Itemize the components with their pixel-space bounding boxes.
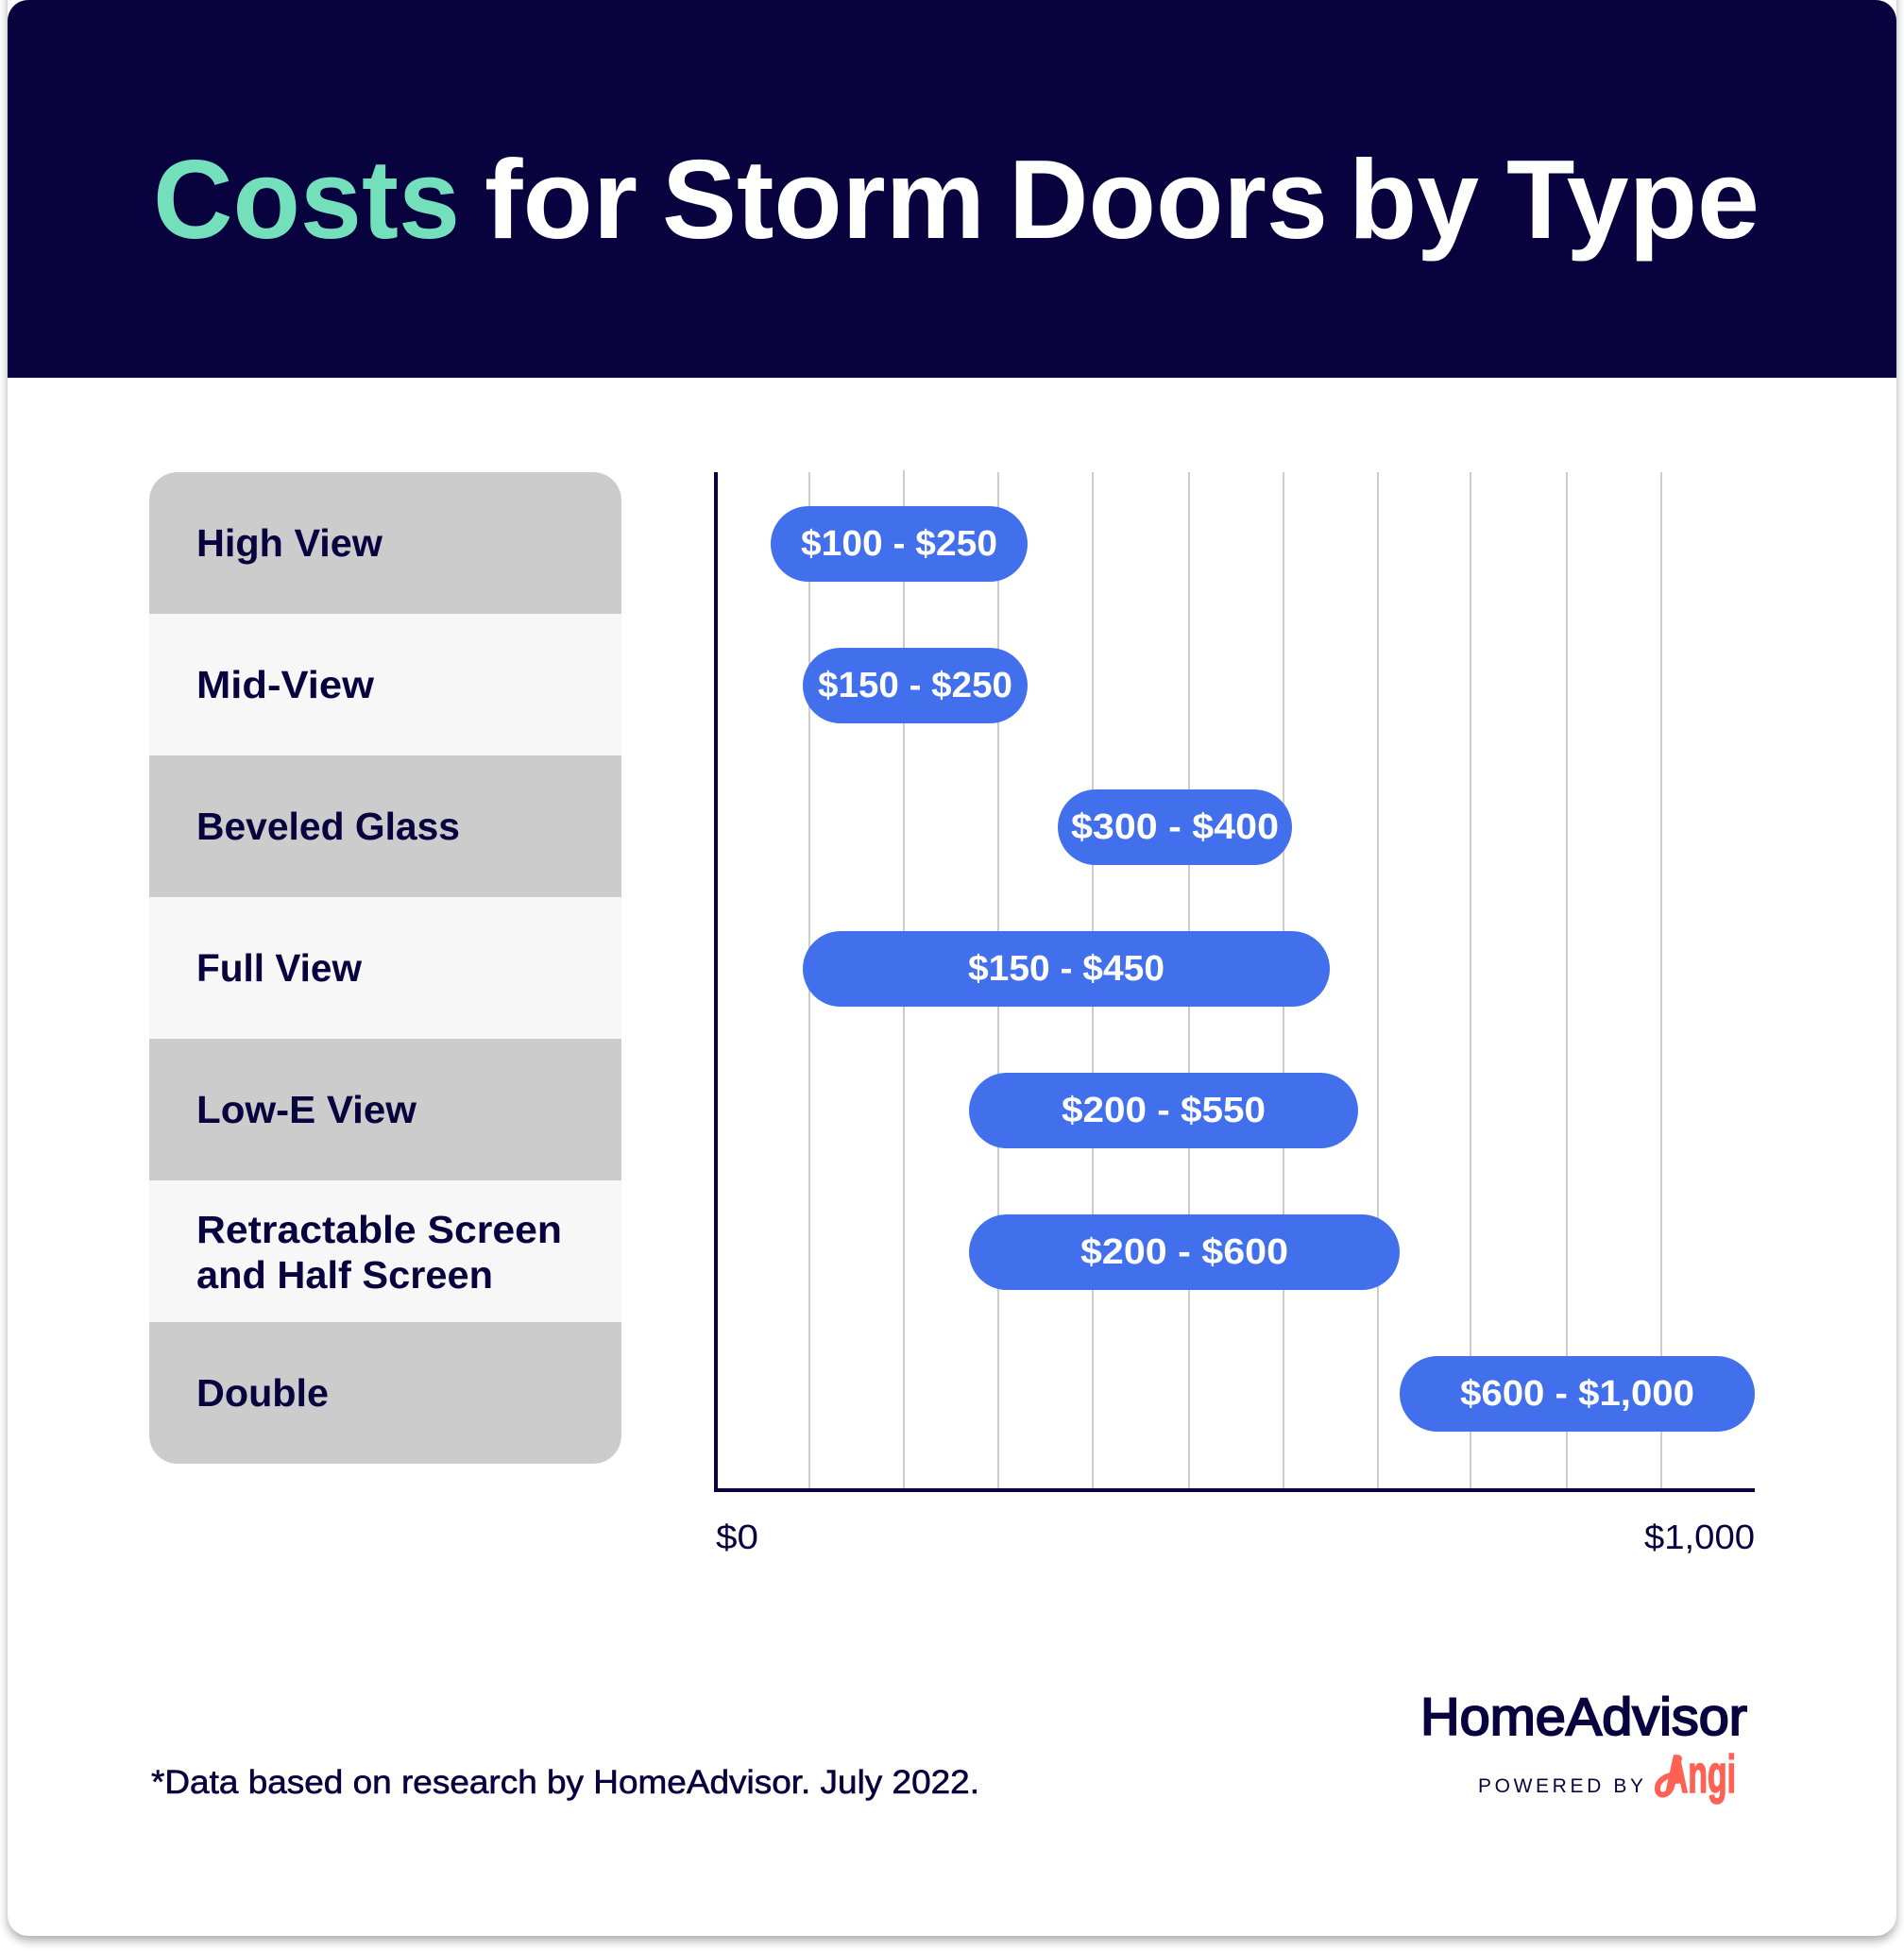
title: Doors (1009, 137, 1328, 263)
bar: Low-E View (969, 1073, 1358, 1148)
axis label: maximum: $1,000 (1644, 1518, 1755, 1556)
bar: Mid-View (803, 648, 1028, 723)
bar: Beveled Glass (1058, 789, 1292, 865)
wordmark: Angi (1658, 1744, 1736, 1805)
title: Storm (662, 137, 985, 263)
title: Type (1506, 137, 1760, 263)
title: by (1349, 137, 1479, 263)
panel: title header (8, 0, 1896, 378)
label: Retractable Screen and Half Screen: Retractable Screen (196, 1208, 562, 1251)
bar: Retractable Screen and Half Screen: $200 - $600 (1080, 1232, 1288, 1272)
label: Beveled Glass: Beveled Glass (196, 805, 460, 848)
label: Double: Double (196, 1371, 329, 1415)
bar: Retractable Screen and Half Screen (969, 1214, 1400, 1290)
tagline: powered by: POWERED BY (1478, 1775, 1643, 1797)
label: High View: High View (196, 521, 382, 565)
bar: Full View: $150 - $450 (968, 949, 1164, 989)
footnote: *Data based on research by HomeAdvisor. July 2022. (151, 1764, 979, 1801)
title: Costs (153, 137, 460, 263)
label: Retractable Screen and Half Screen: and Half Screen (196, 1253, 493, 1297)
bar: Low-E View: $200 - $550 (1062, 1091, 1266, 1130)
panel: door type labels (149, 472, 621, 1464)
title (153, 137, 1760, 263)
bar: Beveled Glass: $300 - $400 (1071, 807, 1279, 847)
label: Low-E View: Low-E View (196, 1088, 416, 1131)
chart axes (716, 472, 1755, 1490)
axis label: minimum: $0 (716, 1518, 758, 1556)
bar: Double (1400, 1356, 1755, 1432)
label: Mid-View: Mid-View (196, 663, 374, 706)
label: Full View: Full View (196, 946, 362, 990)
bar: Mid-View: $150 - $250 (818, 666, 1012, 705)
title: for (484, 137, 638, 263)
label: Retractable Screen and Half Screen (196, 1208, 562, 1297)
bar: Double: $600 - $1,000 (1460, 1374, 1694, 1414)
bar: High View (771, 506, 1028, 582)
bar chart (716, 470, 1755, 1556)
wordmark: Angi: Angi (1665, 1744, 1736, 1805)
bar: High View: $100 - $250 (801, 524, 997, 564)
logo: HomeAdvisor powered by Angi (1420, 1687, 1747, 1805)
bar: Full View (803, 931, 1330, 1007)
wordmark: HomeAdvisor: HomeAdvisor (1420, 1687, 1747, 1746)
